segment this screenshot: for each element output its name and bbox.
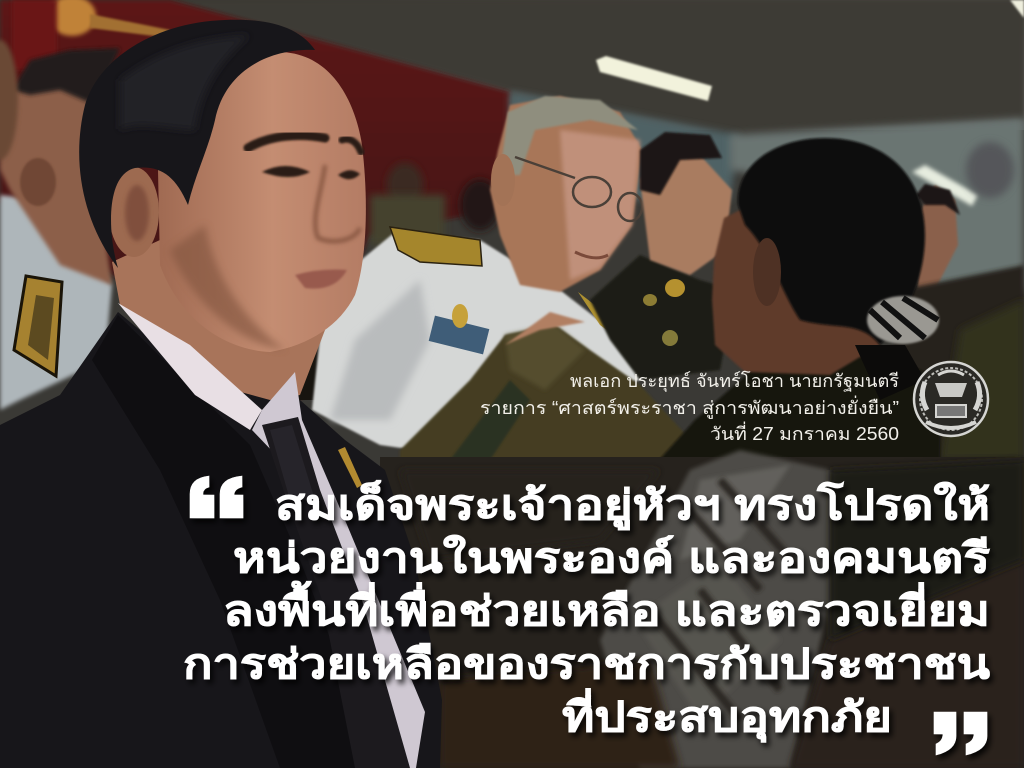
figure: main man in dark suit [0, 20, 442, 768]
curtain rail ornament [48, 0, 96, 36]
far background people [387, 163, 423, 207]
programme name: รายการ “ศาสตร์พระราชา สู่การพัฒนาอย่างยั่งยืน” [480, 395, 899, 419]
nose shadow [315, 165, 360, 241]
quote text [183, 476, 990, 755]
gold epaulette [14, 276, 62, 376]
medals [429, 316, 489, 354]
ear [109, 167, 159, 257]
eyes [262, 166, 310, 177]
hair bun lower [855, 345, 925, 400]
mouth [295, 270, 347, 289]
suit [0, 312, 442, 768]
red curtain [0, 0, 510, 400]
hair [79, 20, 315, 268]
lapel pin [338, 447, 362, 488]
quote line 3: ลงพื้นที่เพื่อช่วยเหลือ และตรวจเยี่ยม [223, 581, 990, 634]
glasses [515, 157, 642, 221]
face [158, 52, 366, 352]
caption: speaker, programme and date [480, 370, 899, 444]
hair [738, 138, 925, 345]
patterned shirt [600, 450, 830, 768]
tie [262, 417, 410, 768]
neck and face [490, 96, 642, 292]
hair tie [867, 296, 939, 344]
ear [20, 158, 56, 206]
grey hair [500, 96, 638, 175]
neck [112, 240, 325, 400]
gold shoulder board [390, 227, 482, 266]
figure: woman seen from behind [650, 138, 940, 470]
figure: olive bag [400, 312, 700, 470]
figure: officer in dark uniform [590, 132, 735, 380]
panel: darkened caption overlay [380, 450, 1024, 768]
closing quote mark [934, 712, 987, 755]
mouth [575, 252, 608, 258]
figure: far right person [880, 184, 1024, 470]
icon: Thai government seal [914, 362, 988, 436]
dark arm [440, 660, 680, 768]
eyebrows [248, 135, 325, 148]
date: วันที่ 27 มกราคม 2560 [710, 421, 899, 444]
cheek shading [170, 225, 285, 350]
opening quote mark [190, 476, 243, 518]
figure: man at far left in white uniform [0, 40, 120, 410]
figure: officer in white uniform with glasses [312, 96, 642, 455]
speaker name: พลเอก ประยุทธ์ จันทร์โอชา นายกรัฐมนตรี [570, 370, 899, 392]
quote line 4: การช่วยเหลือของราชการกับประชาชน [183, 641, 990, 687]
ceiling lamp [596, 56, 712, 101]
pale wall [510, 92, 740, 200]
ceiling [170, 0, 1024, 135]
quote line 5: ที่ประสบอุทกภัย [562, 688, 892, 743]
shirt collar [118, 303, 262, 430]
quote line 2: หน่วยงานในพระองค์ และองคมนตรี [233, 534, 990, 581]
quote line 1: สมเด็จพระเจ้าอยู่หัวฯ ทรงโปรดให้ [275, 480, 990, 531]
